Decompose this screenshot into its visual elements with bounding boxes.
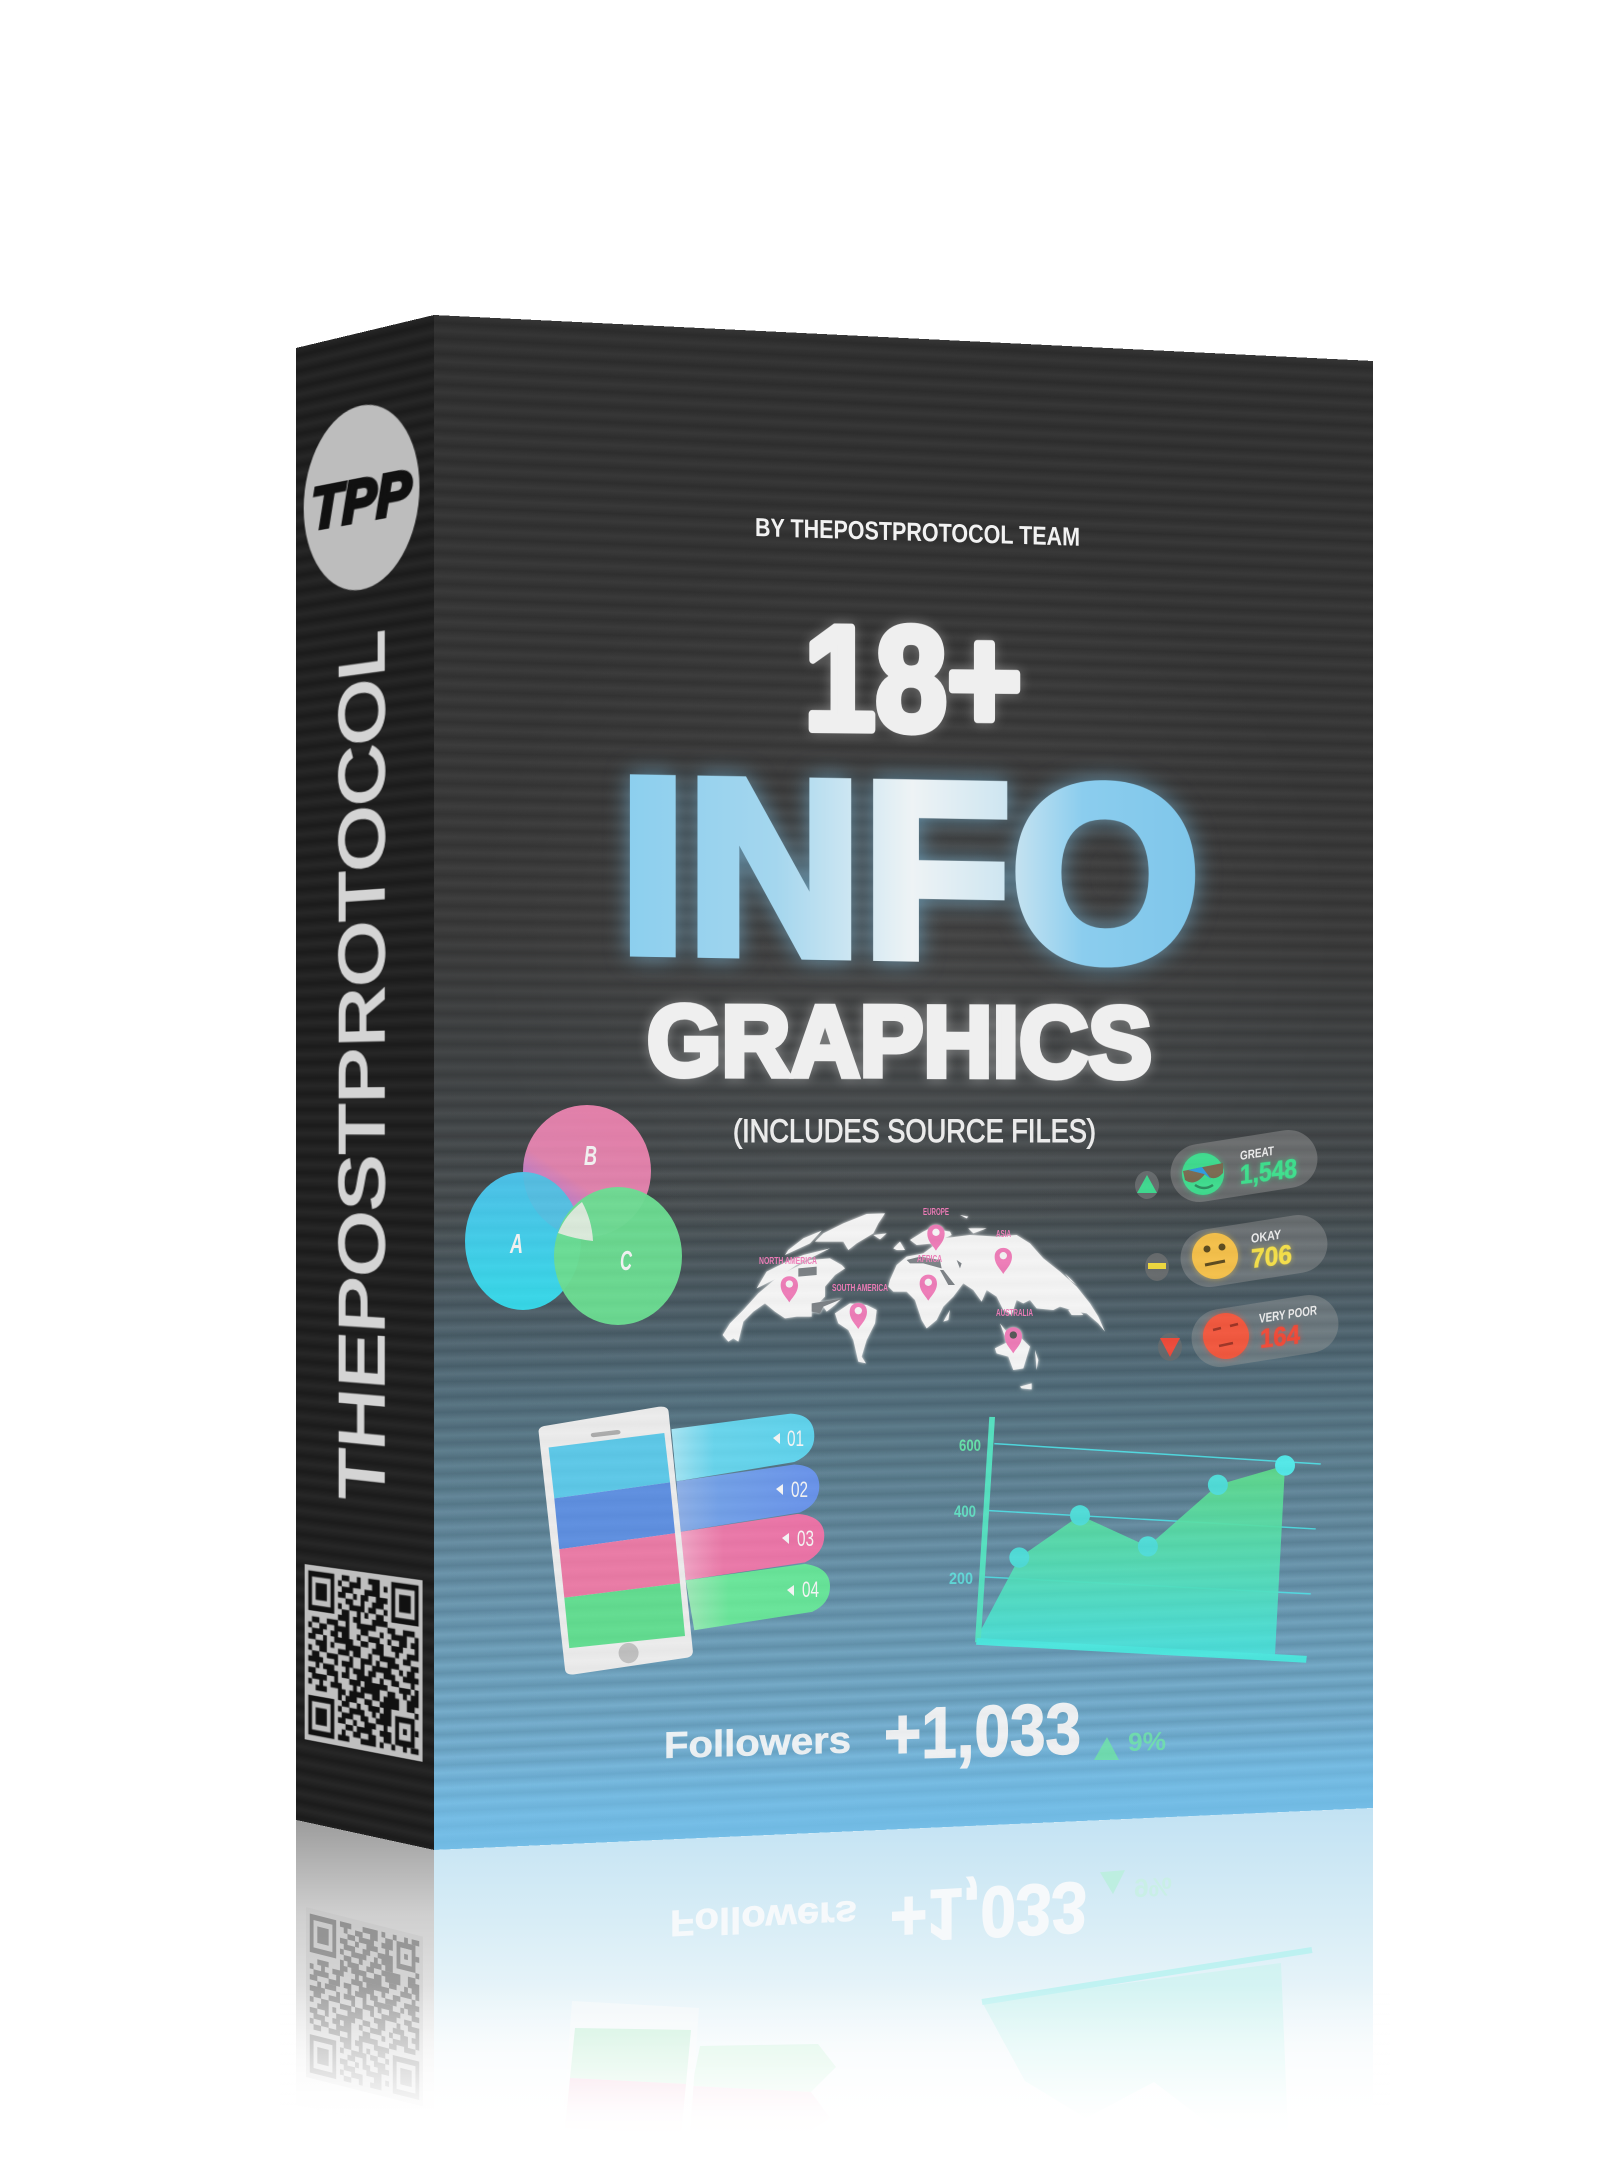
phone with tabs xyxy=(539,1407,830,1674)
percent: 9% xyxy=(1128,1726,1166,1757)
tab 4 xyxy=(686,1564,830,1630)
axis labels xyxy=(949,1436,981,1588)
followers stat xyxy=(664,1689,1166,1775)
venn labels: C xyxy=(620,1245,632,1276)
area xyxy=(976,1465,1285,1654)
grid lines xyxy=(984,1444,1321,1594)
subheading: (INCLUDES SOURCE FILES) xyxy=(733,1113,1096,1149)
artwork layer: box front content and reflection xyxy=(296,518,1373,2100)
reflection: front face xyxy=(434,1808,1373,2135)
reflection: phone xyxy=(562,2001,836,2135)
reflection: followers text: +1,033 xyxy=(890,1866,1087,1957)
axis labels: 200 xyxy=(949,1569,973,1588)
venn labels: A xyxy=(509,1228,523,1259)
map labels xyxy=(759,1207,1033,1319)
venn overlap AB xyxy=(524,1172,573,1230)
panel: box front face xyxy=(434,315,1373,1850)
venn circle A xyxy=(465,1172,581,1310)
map labels: AFRICA xyxy=(917,1254,942,1265)
continents xyxy=(723,1213,1105,1389)
followers label: Followers xyxy=(664,1719,851,1766)
venn center wedge xyxy=(558,1202,593,1241)
heading: 18+: 18+ xyxy=(804,596,1022,763)
map labels: SOUTH AMERICA xyxy=(832,1283,888,1294)
followers value: +1,033 xyxy=(884,1689,1081,1775)
reflection: followers text: 9% xyxy=(1134,1871,1172,1903)
byline: BY THEPOSTPROTOCOL TEAM xyxy=(755,512,1080,552)
world map xyxy=(723,1207,1105,1389)
indicator down xyxy=(1158,1333,1182,1361)
icon: cool face xyxy=(1182,1153,1224,1195)
pill background xyxy=(1176,1211,1332,1291)
rating: okay xyxy=(1145,1211,1332,1291)
tab numbers: 01 xyxy=(787,1426,804,1451)
venn labels xyxy=(509,1140,632,1276)
icon: neutral face xyxy=(1192,1233,1238,1279)
value: 1,548 xyxy=(1240,1152,1297,1190)
tab 3 xyxy=(680,1514,824,1580)
pill background xyxy=(1166,1126,1322,1206)
axes xyxy=(976,1417,1306,1659)
venn diagram xyxy=(465,1105,682,1325)
pill background xyxy=(1187,1291,1343,1371)
tab numbers: 04 xyxy=(802,1577,819,1602)
speaker and home button xyxy=(590,1430,621,1438)
tab 1 xyxy=(671,1414,814,1481)
spine title: THEPOSTPROTOCOL xyxy=(323,608,385,1483)
map labels: ASIA xyxy=(996,1229,1011,1240)
rating: great xyxy=(1135,1126,1322,1206)
pin holes xyxy=(786,1229,1017,1339)
venn circle B xyxy=(523,1105,651,1237)
heading: GRAPHICS: GRAPHICS xyxy=(647,985,1152,1099)
logo badge: TPP xyxy=(310,441,398,540)
tab numbers xyxy=(773,1426,819,1602)
reflection: followers text: Followers xyxy=(670,1893,857,1945)
venn labels: B xyxy=(584,1140,597,1171)
heading: INFO: INFO xyxy=(619,726,1200,1014)
reflection: spine xyxy=(296,1820,434,2135)
screen bands xyxy=(549,1433,670,1498)
QR code xyxy=(305,1564,423,1762)
map pins xyxy=(781,1225,1022,1353)
reflection fade to white xyxy=(280,1985,1390,2135)
indicator up xyxy=(1135,1171,1159,1199)
panel: box spine xyxy=(296,315,434,1850)
icon: sad face xyxy=(1203,1313,1249,1359)
indicator flat xyxy=(1145,1253,1169,1281)
reflection: chart xyxy=(982,1950,1312,2135)
tab 2 xyxy=(676,1464,819,1532)
venn circle C xyxy=(554,1187,682,1325)
map labels: NORTH AMERICA xyxy=(759,1256,817,1267)
data points xyxy=(1009,1455,1295,1568)
area chart xyxy=(949,1417,1321,1659)
label: GREAT xyxy=(1240,1144,1274,1163)
map labels: EUROPE xyxy=(923,1207,949,1218)
label: OKAY xyxy=(1251,1227,1281,1246)
map labels: AUSTRALIA xyxy=(996,1308,1033,1319)
tab numbers: 03 xyxy=(797,1526,814,1551)
reflection: followers text xyxy=(670,1853,1172,1981)
value: 164 xyxy=(1260,1318,1300,1354)
logo badge xyxy=(304,393,419,599)
value: 706 xyxy=(1251,1238,1292,1274)
rating: very poor xyxy=(1158,1291,1343,1371)
map gaps xyxy=(798,1257,962,1313)
phone body xyxy=(539,1407,693,1674)
axis labels: 600 xyxy=(959,1436,981,1455)
tab numbers: 02 xyxy=(791,1477,808,1502)
axis labels: 400 xyxy=(954,1502,976,1521)
label: VERY POOR xyxy=(1259,1302,1317,1326)
up triangle xyxy=(1094,1737,1119,1760)
